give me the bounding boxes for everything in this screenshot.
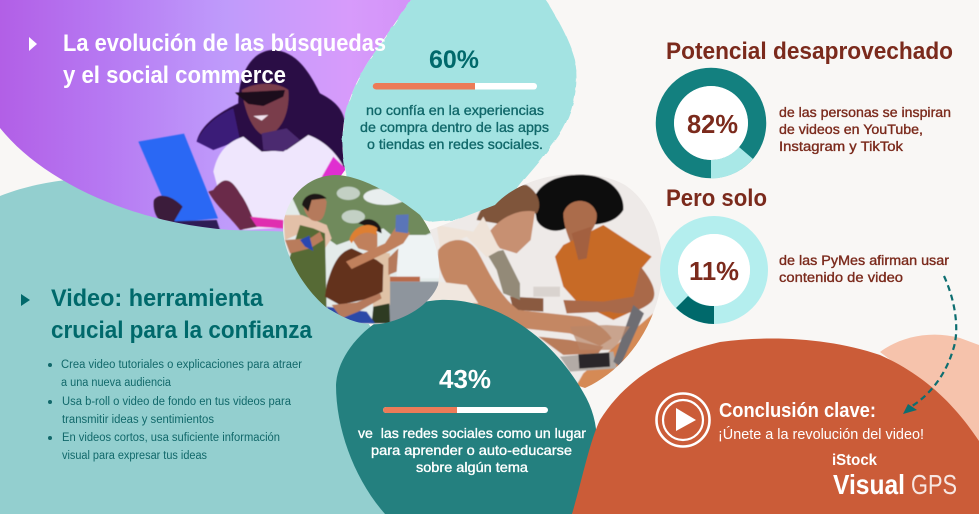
stat: 60%: de compra dentro de las apps xyxy=(360,119,549,135)
text: 11% description: de las PyMes afirman usar xyxy=(779,253,950,268)
stat: 60%: 60% xyxy=(429,46,479,74)
stat: 43%: sobre algún tema xyxy=(416,459,528,475)
list: video tips: Crea video tutoriales o explicaciones para atraer xyxy=(61,359,302,371)
panel: orange conclusion blob xyxy=(572,338,979,514)
heading: potencial desaprovechado: Potencial desaprovechado xyxy=(666,38,953,65)
arrow: dashed curve to conclusion xyxy=(903,276,956,414)
chart: donut 11% xyxy=(669,225,759,324)
icon: play button xyxy=(656,394,710,446)
chart: donut 82%: 82% xyxy=(687,111,738,139)
panel: light teal blob 60% xyxy=(342,0,576,222)
photo: two women working on a laptop xyxy=(427,174,662,388)
title: search evolution xyxy=(29,30,386,89)
stat: 60%: o tiendas en redes sociales. xyxy=(367,136,543,152)
stat: 60% xyxy=(360,46,549,152)
text: 82% description xyxy=(779,105,951,154)
title: search evolution: y el social commerce xyxy=(63,62,286,89)
stat: 43%: para aprender o auto-educarse xyxy=(371,442,572,458)
logo: iStock Visual GPS xyxy=(832,452,957,500)
text: conclusion: Conclusión clave: xyxy=(719,400,876,422)
photo: group of friends taking a selfie xyxy=(283,175,439,324)
stat: 43%: ve las redes sociales como un lugar xyxy=(358,425,586,441)
logo: iStock Visual GPS: GPS xyxy=(911,469,957,500)
panel: left teal background xyxy=(0,180,420,514)
decoration: peach brush shape xyxy=(880,335,979,450)
chart: donut 11%: 11% xyxy=(689,258,739,286)
heading: video xyxy=(21,285,312,344)
photo: woman with tablet xyxy=(138,50,355,230)
text: 82% description: de las personas se inspiran xyxy=(779,105,951,120)
list: video tips: a una nueva audiencia xyxy=(61,377,172,389)
text: 11% description xyxy=(779,253,950,285)
text: conclusion: ¡Únete a la revolución del video! xyxy=(718,426,924,443)
logo: iStock Visual GPS: iStock xyxy=(832,452,877,469)
title: search evolution: La evolución de las búsquedas xyxy=(63,30,386,57)
text: conclusion xyxy=(718,400,924,443)
list: video tips xyxy=(48,359,302,462)
list: video tips: transmitir ideas y sentimientos xyxy=(62,414,214,426)
panel: purple background xyxy=(0,0,411,232)
heading: pero solo: Pero solo xyxy=(666,185,767,212)
chart: donut 82% xyxy=(665,77,757,178)
text: 82% description: de videos en YouTube, xyxy=(779,122,923,137)
heading: video: crucial para la confianza xyxy=(51,317,312,344)
panel: dark teal blob 43% xyxy=(336,300,597,514)
logo: iStock Visual GPS: Visual xyxy=(833,469,905,500)
text: 82% description: Instagram y TikTok xyxy=(779,139,903,154)
stat: 43%: 43% xyxy=(439,366,491,394)
list: video tips: Usa b-roll o video de fondo en tus videos para xyxy=(62,396,292,408)
heading: video: Video: herramienta xyxy=(51,285,263,312)
stat: 43% xyxy=(358,366,586,475)
text: 11% description: contenido de video xyxy=(779,270,903,285)
list: video tips: En videos cortos, usa suficiente información xyxy=(62,432,280,444)
stat: 60%: no confía en la experiencias xyxy=(366,102,544,118)
list: video tips: visual para expresar tus ideas xyxy=(62,450,207,462)
